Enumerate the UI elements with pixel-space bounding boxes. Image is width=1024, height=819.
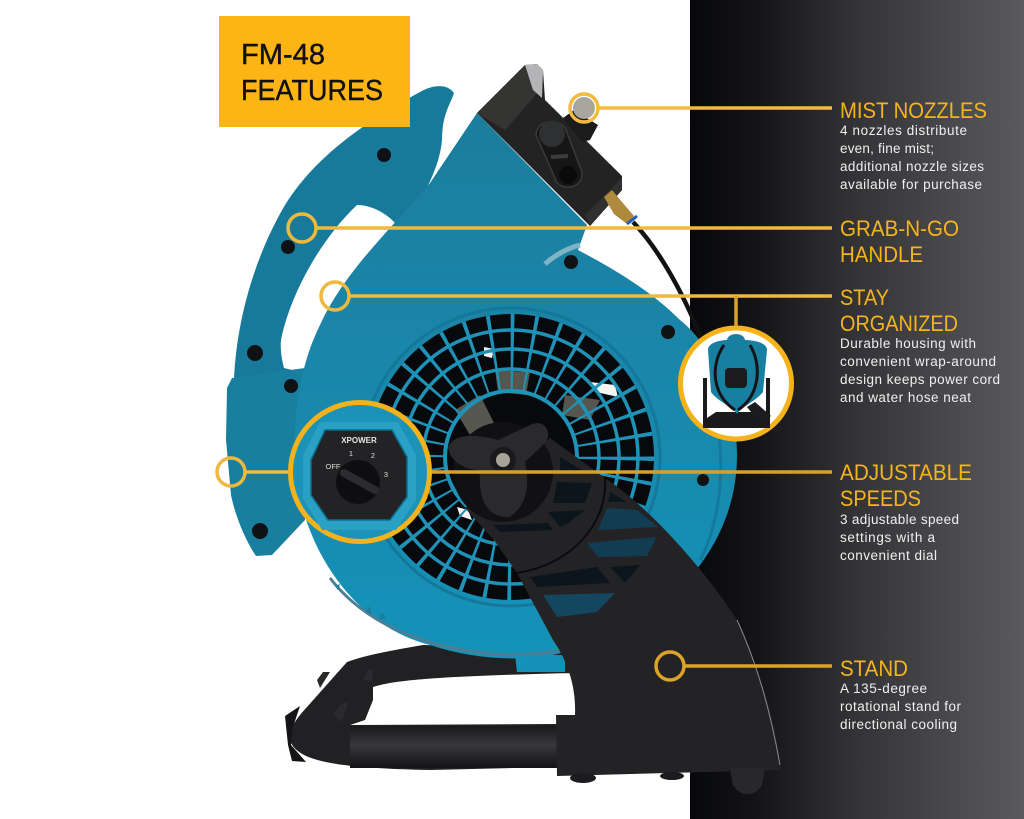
housing: side right ribs xyxy=(690,345,721,560)
stand slots xyxy=(493,457,658,617)
marker: adjustable speeds xyxy=(217,458,832,486)
block button panel xyxy=(536,122,582,187)
handle xyxy=(234,86,454,385)
stand fin xyxy=(465,438,781,794)
callout: mist nozzles: additional nozzle sizes xyxy=(840,159,984,174)
marker: grab-n-go handle xyxy=(288,214,832,242)
title box: FEATURES xyxy=(241,75,383,107)
title box: FM-48 xyxy=(241,39,325,71)
callout: stay organized xyxy=(840,285,1000,405)
callout: stay organized: Durable housing with xyxy=(840,336,976,351)
callout: stand xyxy=(840,656,962,732)
thumbnail dial xyxy=(725,368,747,388)
marker: stay organized xyxy=(321,282,832,328)
dial knob xyxy=(336,460,380,504)
dial labels: 3 xyxy=(384,470,388,479)
callout: stay organized: convenient wrap-around xyxy=(840,354,996,369)
stand arc xyxy=(517,478,605,573)
callout: stand: directional cooling xyxy=(840,717,957,732)
thumbnail fan xyxy=(708,334,767,414)
callout: grab-n-go handle: GRAB-N-GO xyxy=(840,216,959,241)
dial plate xyxy=(311,430,407,520)
control head block xyxy=(477,64,622,226)
callout: mist nozzles: MIST NOZZLES xyxy=(840,98,987,123)
callout: mist nozzles xyxy=(840,98,987,192)
dial labels xyxy=(326,449,388,479)
callout: stand: STAND xyxy=(840,656,908,681)
bright gaps behind grille xyxy=(457,347,618,520)
fan grille xyxy=(362,308,660,606)
feet xyxy=(570,768,765,794)
dial labels: 2 xyxy=(371,451,375,460)
marker: mist nozzles xyxy=(570,94,832,122)
inset: wrapped cord thumbnail xyxy=(680,328,792,439)
water hose and brass fitting xyxy=(604,190,702,340)
callout: grab-n-go handle: HANDLE xyxy=(840,242,923,267)
callout markers and leader lines xyxy=(217,94,832,680)
housing: lower rim xyxy=(330,578,585,655)
inset: speed dial magnifier xyxy=(290,402,430,542)
adjustment knob xyxy=(448,422,553,522)
thumbnail cord xyxy=(715,345,757,410)
stand edge highlight xyxy=(737,620,780,765)
dial brand: XPOWER xyxy=(341,436,377,445)
screw holes xyxy=(247,148,709,539)
callout: adjustable speeds: settings with a xyxy=(840,530,935,545)
callout: adjustable speeds: 3 adjustable speed xyxy=(840,512,959,527)
callout: grab-n-go handle xyxy=(840,216,959,267)
callout: stay organized: ORGANIZED xyxy=(840,311,958,336)
marker: stand xyxy=(656,652,832,680)
callout: adjustable speeds: convenient dial xyxy=(840,548,937,563)
housing: left control block xyxy=(226,368,305,556)
callout: adjustable speeds: SPEEDS xyxy=(840,486,921,511)
callout: stay organized: and water hose neat xyxy=(840,390,971,405)
callout: stand: A 135-degree xyxy=(840,681,927,696)
stand tube: U-shaped base xyxy=(285,645,575,770)
dial labels: 1 xyxy=(349,449,353,458)
product: misting fan xyxy=(226,64,781,794)
title box xyxy=(219,16,410,127)
callout: mist nozzles: 4 nozzles distribute xyxy=(840,123,967,138)
grille spokes xyxy=(406,352,616,562)
callout: adjustable speeds: ADJUSTABLE xyxy=(840,460,972,485)
callout text xyxy=(840,98,1000,732)
housing: small bottom fins xyxy=(335,584,386,620)
housing: outlet crease xyxy=(545,245,580,264)
fan blades behind grille xyxy=(455,370,600,435)
dial bezel xyxy=(303,422,416,530)
mist nozzle xyxy=(563,97,598,142)
dial labels: OFF xyxy=(326,462,341,471)
callout: stay organized: design keeps power cord xyxy=(840,372,1000,387)
callout: stay organized: STAY xyxy=(840,285,889,310)
grille rings xyxy=(384,330,638,584)
callout: stand: rotational stand for xyxy=(840,699,962,714)
thumbnail plug xyxy=(747,402,771,423)
background panel: dark gradient xyxy=(690,0,1024,819)
callout: mist nozzles: available for purchase xyxy=(840,177,982,192)
callout: mist nozzles: even, fine mist; xyxy=(840,141,934,156)
callout: adjustable speeds xyxy=(840,460,972,563)
thumbnail stand xyxy=(703,378,770,428)
housing: main blower body xyxy=(295,113,737,658)
